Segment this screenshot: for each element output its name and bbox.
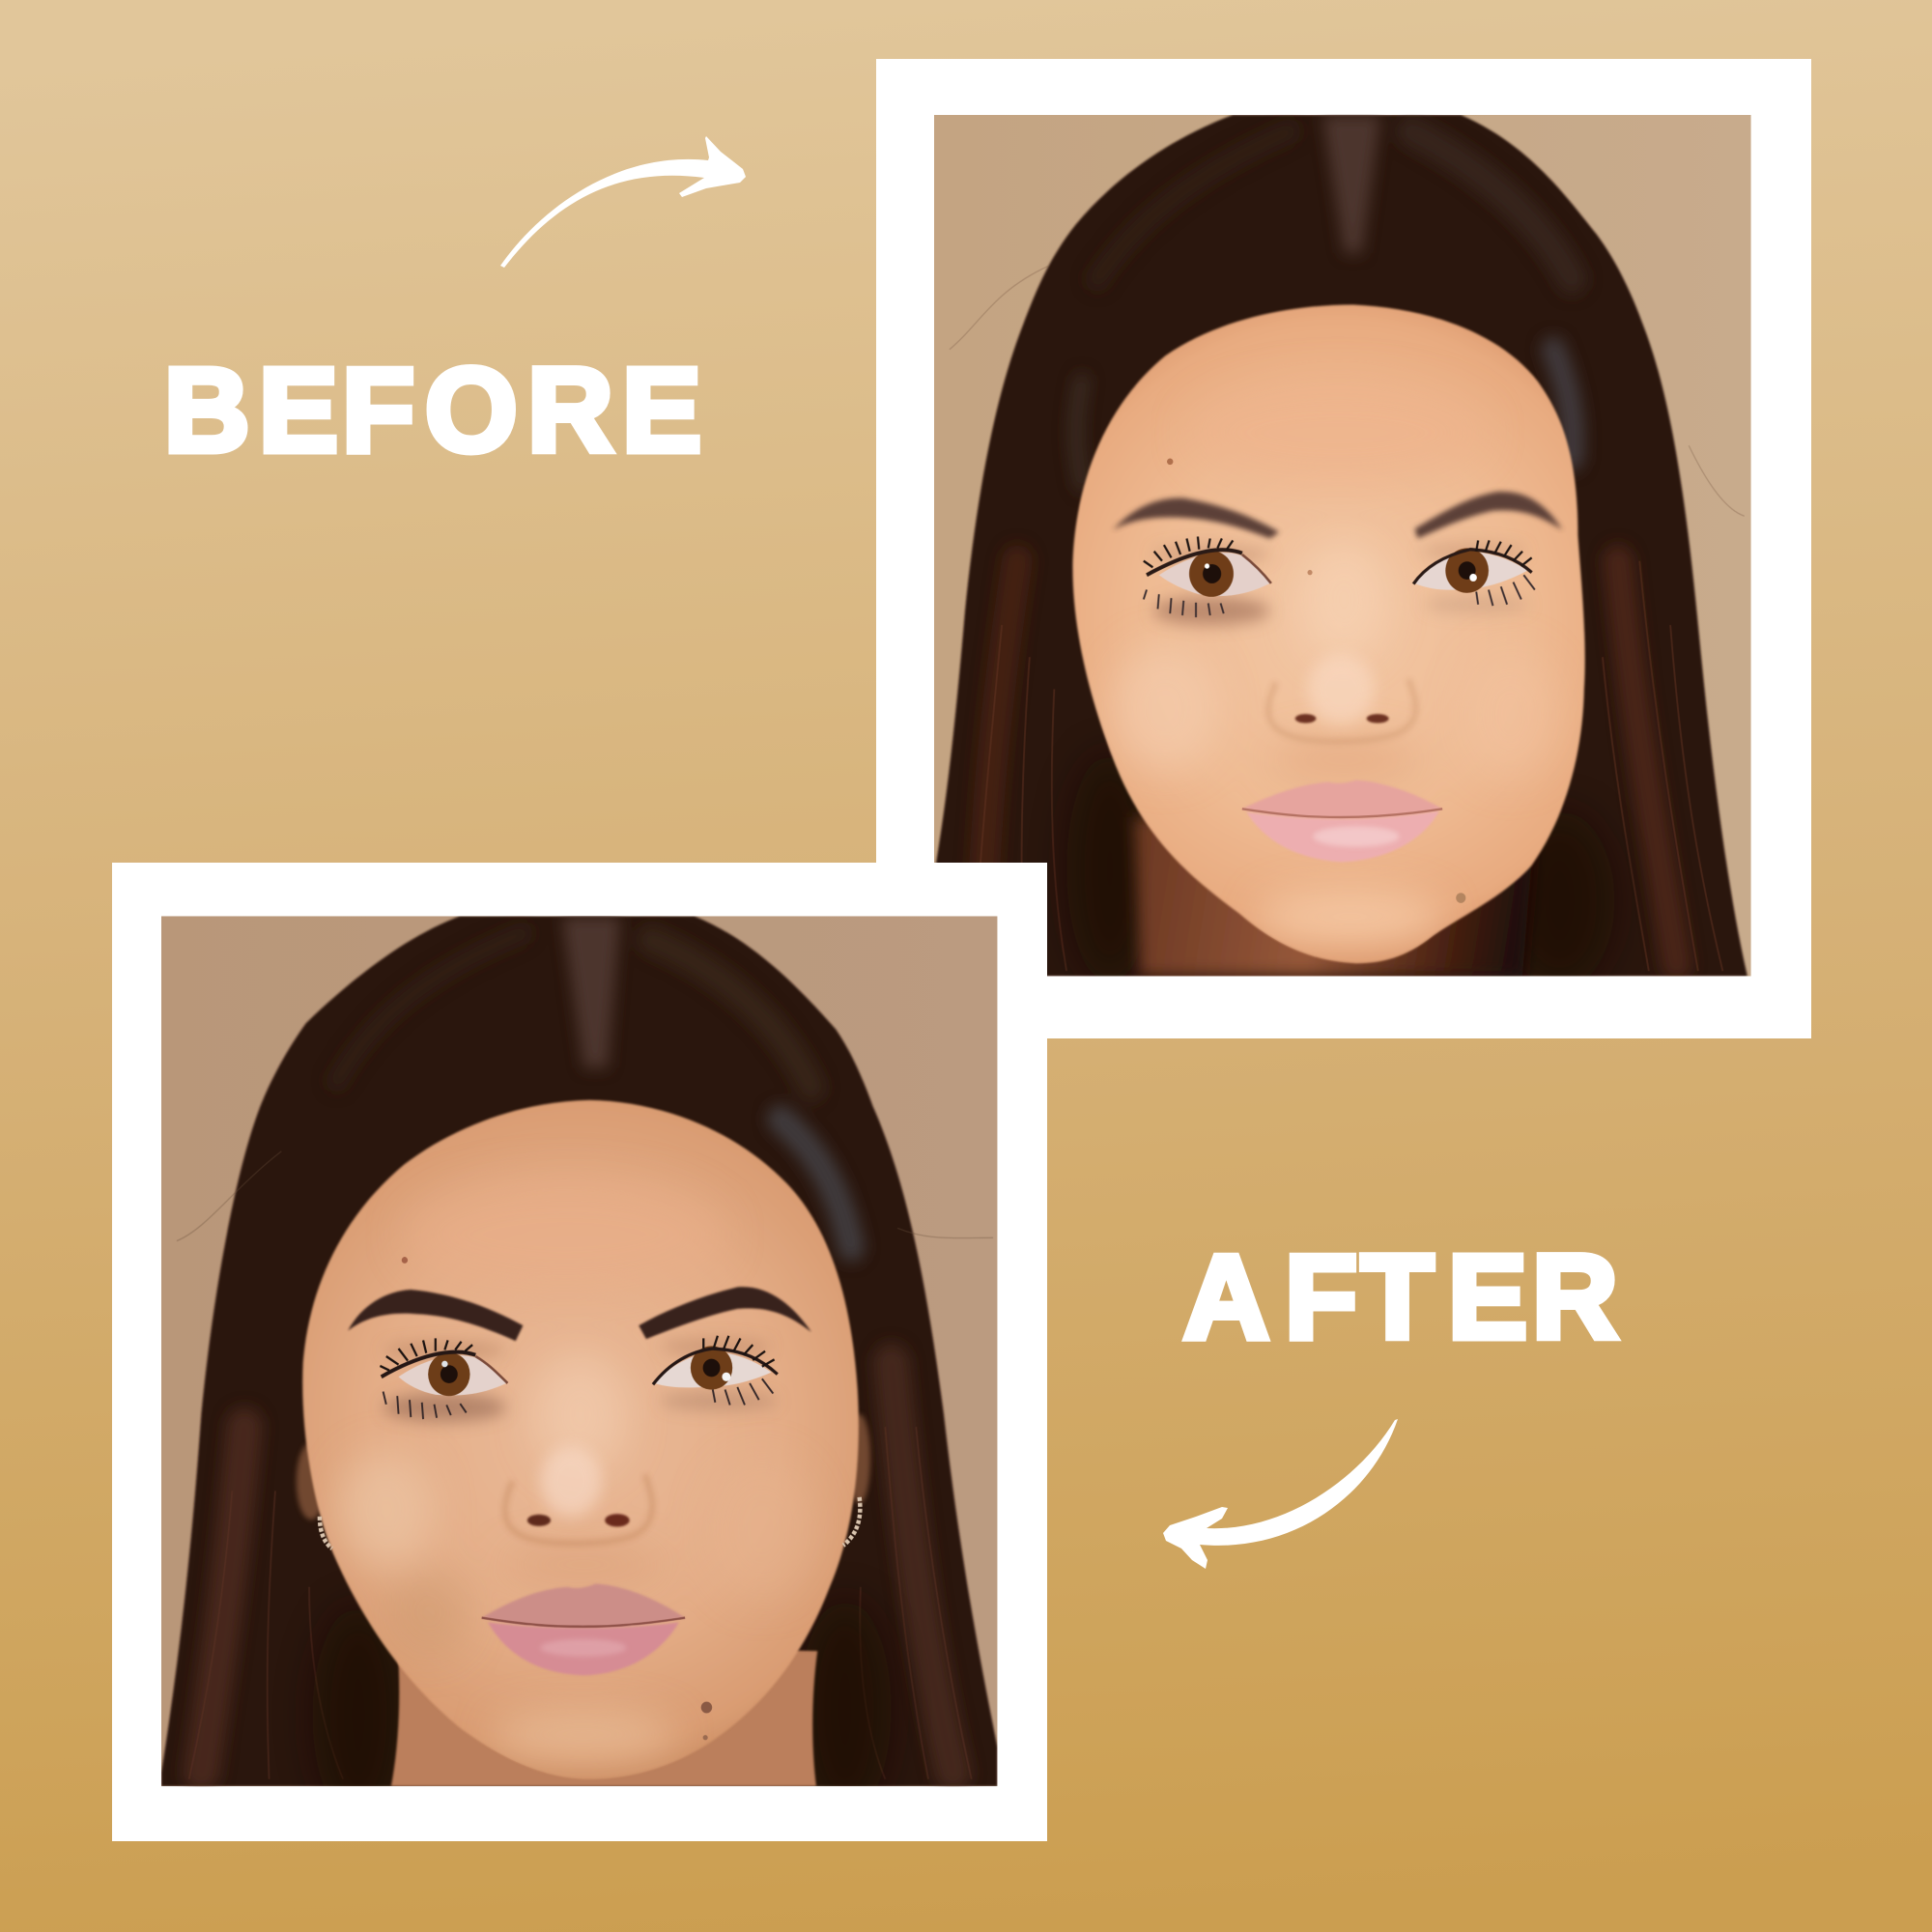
ears xyxy=(297,1414,870,1520)
under-eye shadows xyxy=(384,1339,778,1422)
eyebrows xyxy=(348,1287,811,1341)
panel: after photo frame xyxy=(112,863,1047,1841)
hair flyaways xyxy=(177,1151,993,1241)
hair flyaways xyxy=(950,267,1745,516)
nose xyxy=(505,1446,652,1544)
eyebrows xyxy=(1113,492,1563,538)
heading: AFTER: AFTER xyxy=(1183,1232,1618,1364)
neck xyxy=(1134,817,1535,976)
dark shadow beside the neck xyxy=(304,1602,896,1786)
right eye xyxy=(653,1336,778,1405)
lips xyxy=(1242,780,1442,862)
arrow: before arrow pointing to the top photo xyxy=(500,136,746,268)
dark shadow beside the jaw xyxy=(1071,782,1613,976)
moles xyxy=(402,1257,712,1740)
panel: before photo frame xyxy=(876,59,1811,1038)
photo: before portrait xyxy=(934,115,1751,990)
face xyxy=(302,1100,859,1779)
neck xyxy=(391,1644,817,1786)
arrow: after arrow pointing to the bottom photo xyxy=(1163,1419,1398,1569)
under-eye shadows xyxy=(1152,544,1528,625)
lips xyxy=(482,1583,685,1675)
heading: BEFORE: BEFORE xyxy=(164,345,701,477)
right eye xyxy=(1413,540,1535,606)
nose xyxy=(1268,654,1416,742)
earrings xyxy=(320,1497,860,1548)
face xyxy=(1072,304,1585,963)
left eye xyxy=(380,1338,507,1419)
photo: after portrait xyxy=(161,916,997,1824)
left eye xyxy=(1144,536,1271,617)
moles xyxy=(1167,459,1465,903)
